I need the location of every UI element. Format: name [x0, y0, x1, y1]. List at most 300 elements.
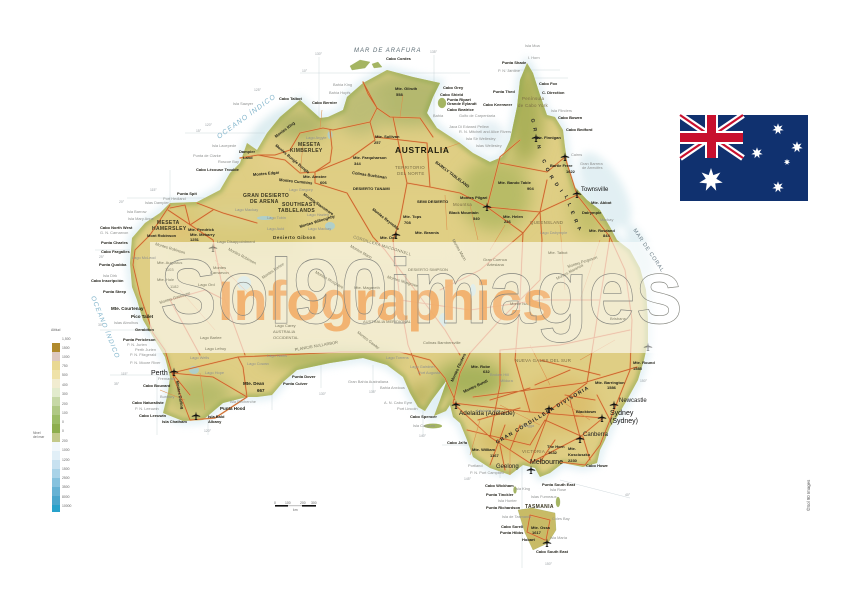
- south east and Tasmania labels: P. N. Port Campbell: [470, 470, 504, 475]
- scale bar: 100: [285, 501, 291, 505]
- south east and Tasmania labels: Mte. Round: [633, 360, 655, 365]
- north and Kimberley labels: 344: [354, 161, 361, 166]
- interior labels under the banner: Lago Carey: [275, 323, 296, 328]
- south east and Tasmania labels: 1617: [532, 530, 542, 535]
- south and west coast labels: Cabo Inscripción: [91, 278, 124, 283]
- interior labels under the banner: Montes Gascoyne: [159, 290, 192, 305]
- interior labels under the banner: Lago Ord: [198, 282, 215, 287]
- graticule degree labels: 130°: [319, 392, 327, 396]
- south east and Tasmania labels: 1586: [607, 385, 617, 390]
- south east and Tasmania labels: Isla Rose: [550, 487, 566, 492]
- south and west coast labels: Bahía Anxious: [380, 385, 405, 390]
- graticule degree labels: 40°: [625, 493, 631, 497]
- south and west coast labels: 1251: [190, 237, 200, 242]
- north and Kimberley labels: Cabo Lécouse Trouble: [196, 167, 240, 172]
- elevation legend: 500: [62, 373, 68, 377]
- south east and Tasmania labels: The Horn: [547, 444, 565, 449]
- south and west coast labels: Islas Dampier: [145, 200, 169, 205]
- ocean labels: MAR DE ARAFURA: [354, 48, 421, 54]
- interior labels under the banner: Gran Cuenca: [483, 257, 508, 262]
- Cape York and Queensland labels: Black Mountain: [449, 210, 479, 215]
- north and Kimberley labels: Mte. Gilruth: [395, 86, 418, 91]
- elevation legend: [33, 328, 72, 512]
- lakes: [189, 131, 476, 374]
- north and Kimberley labels: Cabo Talbot: [279, 96, 302, 101]
- south and west coast labels: Cabo North West: [100, 225, 133, 230]
- Cape York and Queensland labels: [449, 43, 615, 238]
- north and Kimberley labels: 708: [404, 220, 411, 225]
- north and Kimberley labels: Mte. Farquharson: [353, 155, 387, 160]
- interior labels under the banner: Carnarvon: [210, 270, 229, 275]
- south and west coast labels: Mte. Dean: [243, 381, 265, 386]
- south and west coast labels: Isla Mary Anne: [128, 216, 154, 221]
- south and west coast labels: Port Hedland: [163, 196, 186, 201]
- elevation legend: 300: [62, 392, 68, 396]
- graticule degree labels: 145°: [464, 477, 472, 481]
- graticule degree labels: 20°: [119, 200, 125, 204]
- Cape York and Queensland labels: Mte. Finnigan: [535, 135, 561, 140]
- Cape York and Queensland labels: I. Horn: [528, 55, 540, 60]
- interior labels under the banner: Montes: [213, 265, 226, 270]
- south and west coast labels: Montes Darling: [175, 380, 185, 410]
- elevation legend: 10000: [62, 504, 72, 508]
- elevation legend: 8000: [62, 495, 70, 499]
- shallow sea tint around the coast: [130, 63, 660, 477]
- interior labels under the banner: Monte Isa: [510, 301, 528, 306]
- graticule degree labels: 120°: [205, 123, 213, 127]
- ocean labels: MAR DE CORAL: [631, 228, 665, 274]
- elevation legend: 1000: [62, 355, 70, 359]
- north and Kimberley labels: Cabo Cordes: [386, 56, 412, 61]
- south and west coast labels: Port Augusta: [418, 370, 441, 375]
- elevation legend: 100: [62, 411, 68, 415]
- north and Kimberley labels: Golfo de Carpentaria: [459, 113, 496, 118]
- interior labels under the banner: AUSTRALIA MERIDIONAL: [363, 319, 412, 324]
- south and west coast labels: Punta Steep: [103, 289, 127, 294]
- north and Kimberley labels: Mte. Sullivan: [375, 134, 400, 139]
- south east and Tasmania labels: NUEVA GALES DEL SUR: [515, 358, 571, 363]
- north and Kimberley labels: Lago Auld: [267, 226, 284, 231]
- south and west coast labels: 667: [257, 388, 265, 393]
- north and Kimberley labels: Lago Mackay: [235, 207, 258, 212]
- south east and Tasmania labels: Mte. Ossa: [531, 525, 551, 530]
- interior labels under the banner: OCCIDENTAL: [273, 335, 299, 340]
- north and Kimberley labels: Bahía Hopfs: [329, 90, 350, 95]
- scale bar: [274, 501, 317, 512]
- road network: [133, 82, 637, 540]
- pale banner strip across the map: [150, 242, 680, 353]
- Cape York and Queensland labels: Gran Barrera: [580, 161, 604, 166]
- Cape York and Queensland labels: Mte. Abbot: [591, 200, 612, 205]
- interior labels under the banner: Artesiana: [487, 262, 505, 267]
- south and west coast labels: Port Lincoln: [397, 406, 418, 411]
- graticule degree labels: 135°: [369, 390, 377, 394]
- north and Kimberley labels: Isla Lacepede: [212, 143, 236, 148]
- south east and Tasmania labels: 2230: [568, 458, 578, 463]
- south and west coast labels: Cabo Fargalles: [101, 249, 130, 254]
- Cape York and Queensland labels: Bartle Frere: [550, 163, 573, 168]
- interior labels under the banner: Montes Barlee: [261, 261, 286, 280]
- north and Kimberley labels: Grande Eylandt: [447, 101, 477, 106]
- north and Kimberley labels: Cabo Shield: [440, 92, 464, 97]
- north and Kimberley labels: Montes Edgar: [253, 170, 280, 177]
- south east and Tasmania labels: Adelaida (Adelaide): [459, 410, 515, 417]
- north and Kimberley labels: 257: [374, 140, 381, 145]
- interior labels under the banner: Montes Gawler: [356, 330, 381, 351]
- interior labels under the banner: Colinas Barnbersville: [423, 340, 461, 345]
- elevation legend: 3500: [62, 485, 70, 489]
- north and Kimberley labels: Lago Mackay: [308, 226, 331, 231]
- south and west coast labels: Mte. Pendrick: [188, 227, 215, 232]
- interior labels under the banner: 1103: [165, 267, 174, 272]
- interior labels under the banner: Mte. Hale: [157, 277, 175, 282]
- south and west coast labels: Isla Recherche: [230, 399, 256, 404]
- Cape York and Queensland labels: 226: [504, 219, 511, 224]
- interior labels under the banner: Brisbane: [610, 316, 627, 321]
- Cape York and Queensland labels: Isla Moa: [525, 43, 541, 48]
- north and Kimberley labels: BARKLY TABLELAND: [434, 160, 471, 189]
- interior labels under the banner: Mte. Magareth: [354, 285, 380, 290]
- north and Kimberley labels: Cabo Beatrice: [447, 107, 475, 112]
- Cape York and Queensland labels: Mountsa: [453, 202, 472, 207]
- north and Kimberley labels: Lago Argyle: [306, 135, 327, 140]
- south east and Tasmania labels: Mte. William: [472, 447, 496, 452]
- south and west coast labels: A. N. Cabo Eyre: [384, 400, 412, 405]
- south and west coast labels: Lago Hope: [205, 370, 224, 375]
- north and Kimberley labels: Montes Bungle Bungle: [274, 143, 311, 175]
- north and Kimberley labels: Bahía King: [333, 82, 352, 87]
- north and Kimberley labels: Cabo Bernier: [312, 100, 338, 105]
- south east and Tasmania labels: Adelaide Hills: [476, 408, 500, 413]
- south east and Tasmania labels: Broken Hill: [490, 372, 509, 377]
- south east and Tasmania labels: Cabo South East: [536, 549, 569, 554]
- south east and Tasmania labels: 632: [483, 369, 490, 374]
- Cape York and Queensland labels: P. N. Jardine: [498, 68, 520, 73]
- scale bar: 300: [311, 501, 317, 505]
- interior labels under the banner: Montes Robinson: [155, 241, 186, 255]
- north and Kimberley labels: Dampier: [239, 149, 255, 154]
- stars: [699, 123, 803, 192]
- elevation legend: 750: [62, 364, 68, 368]
- south east and Tasmania labels: Isla King: [515, 486, 530, 491]
- graticule degree labels: 135°: [430, 50, 438, 54]
- north and Kimberley labels: Mte. Dol: [380, 235, 396, 240]
- north and Kimberley labels: TABLELANDS: [278, 208, 315, 214]
- south and west coast labels: MESETA: [157, 220, 180, 226]
- interior labels under the banner: [155, 234, 627, 352]
- south east and Tasmania labels: Cabo Wickham: [485, 483, 514, 488]
- north and Kimberley labels: Mte. Tops: [403, 214, 422, 219]
- elevation legend: Altitud: [51, 328, 61, 332]
- graticule: [95, 55, 630, 568]
- south and west coast labels: Cabo Naturaliste: [132, 400, 165, 405]
- graticule degree labels: 115°: [150, 188, 157, 192]
- interior labels under the banner: PLANICIE NULLARBOR: [294, 339, 338, 352]
- south and west coast labels: Punta Quobba: [99, 262, 127, 267]
- graticule degree labels: [98, 50, 648, 566]
- south and west coast labels: Pico Tallet: [131, 314, 154, 319]
- south east and Tasmania labels: VICTORIA: [522, 449, 545, 454]
- elevation legend: 2500: [62, 476, 70, 480]
- interior labels under the banner: 1182: [170, 284, 179, 289]
- graticule degree labels: 15°: [196, 129, 202, 133]
- islands: [350, 60, 560, 550]
- south east and Tasmania labels: Geelong: [496, 464, 519, 470]
- Cape York and Queensland labels: Cabo Bowen: [558, 115, 583, 120]
- south and west coast labels: Punta Charles: [101, 240, 129, 245]
- watermark: orange wordmark: Infographics: [218, 269, 553, 332]
- south and west coast labels: G. N. Carnarvon: [100, 230, 128, 235]
- Cape York and Queensland labels: Cabo Bedford: [566, 127, 593, 132]
- graticule degree labels: 35°: [114, 382, 120, 386]
- relief colour masses: [158, 65, 610, 454]
- Cape York and Queensland labels: Cabo Fox: [539, 81, 558, 86]
- north and Kimberley labels: Isla Sir Wellesley: [466, 136, 496, 141]
- ocean labels: OCEANO ÍNDICO: [215, 92, 278, 141]
- interior labels under the banner: Mte. Talbot: [548, 250, 568, 255]
- Cape York and Queensland labels: Cabo Keerweer: [483, 102, 513, 107]
- coastal green rim: [130, 63, 648, 477]
- south and west coast labels: Mte. Courtenay: [111, 306, 144, 311]
- north and Kimberley labels: Colinas Buchanan: [352, 170, 388, 180]
- Cape York and Queensland labels: de Cabo York: [518, 103, 548, 108]
- north and Kimberley labels: Montes Willoughby: [299, 213, 336, 229]
- elevation legend: 200: [62, 402, 68, 406]
- elevation legend: 1200: [62, 458, 70, 462]
- south east and Tasmania labels: 1632: [548, 450, 558, 455]
- interior labels under the banner: CORDILLERA MACDONNELL: [353, 234, 413, 257]
- north and Kimberley labels: KIMBERLEY: [290, 148, 323, 154]
- north and Kimberley labels: Islas Wellesley: [476, 143, 502, 148]
- interior labels under the banner: Montes Musgrave: [387, 274, 419, 288]
- north and Kimberley labels: DE ARENA: [250, 199, 279, 205]
- interior labels under the banner: Lago Lefroy: [205, 346, 226, 351]
- south east and Tasmania labels: Mildura: [500, 378, 514, 383]
- ocean labels: OCEANO ÍNDICO: [89, 294, 123, 360]
- south and west coast labels: Isla Chatham: [162, 419, 187, 424]
- north and Kimberley labels: TERRITORIO: [395, 165, 425, 170]
- south and west coast labels: Mont Robinson: [147, 233, 177, 238]
- graticule degree labels: 30°: [98, 323, 104, 327]
- south east and Tasmania labels: Blacktown: [576, 409, 597, 414]
- south and west coast labels: Albany: [208, 419, 222, 424]
- south and west coast labels: Mte. Meharry: [190, 232, 215, 237]
- graticule degree labels: 120°: [204, 429, 212, 433]
- flag of Australia: [680, 115, 808, 201]
- north and Kimberley labels: Mte. Brannis: [415, 230, 440, 235]
- north and Kimberley labels: Jaca Di Edward Pellew: [449, 124, 489, 129]
- Cape York and Queensland labels: 844: [603, 233, 610, 238]
- south east and Tasmania labels: Wagga: [522, 423, 535, 428]
- south and west coast labels: Cabo Leeuwin: [139, 413, 167, 418]
- graticule degree labels: 150°: [545, 562, 553, 566]
- Cape York and Queensland labels: Montes Pilgari: [460, 195, 487, 200]
- south east and Tasmania labels: Canberra: [583, 432, 609, 438]
- north and Kimberley labels: Montes Cummins: [279, 177, 313, 186]
- south and west coast labels: Isla Dirk: [103, 273, 117, 278]
- north and Kimberley labels: Montes Stansmore: [302, 192, 335, 217]
- scale bar: km: [293, 508, 298, 512]
- north and Kimberley labels: Punta Ripart: [447, 97, 471, 102]
- south and west coast labels: Bunbury: [160, 394, 175, 399]
- Cape York and Queensland labels: Lago Dalrymple: [540, 230, 567, 235]
- north and Kimberley labels: Isla Sawyer: [233, 101, 254, 106]
- south east and Tasmania labels: Portland: [468, 463, 482, 468]
- south and west coast labels: Lago Torrens: [386, 355, 409, 360]
- south and west coast labels: HAMERSLEY: [152, 226, 187, 232]
- south east and Tasmania labels: Punta South East: [542, 482, 576, 487]
- north and Kimberley labels: Punta de Clarke: [193, 153, 221, 158]
- north and Kimberley labels: SOUTHEAST: [282, 202, 316, 208]
- south east and Tasmania labels: Isla Hunter: [498, 498, 518, 503]
- elevation legend: 0: [62, 420, 64, 424]
- south east and Tasmania labels: Melbourne: [530, 459, 563, 466]
- south east and Tasmania labels: Montes Flinders: [449, 352, 467, 382]
- south and west coast labels: Lago Wells: [190, 355, 209, 360]
- interior labels under the banner: Montes Mann: [350, 244, 373, 260]
- south east and Tasmania labels: (Sydney): [610, 418, 638, 425]
- south and west coast labels: Isla Bald: [208, 414, 225, 419]
- Cape York and Queensland labels: GRAN CORDILLERA: [531, 118, 581, 230]
- Cape York and Queensland labels: Cairns: [571, 152, 582, 157]
- north and Kimberley labels: [193, 56, 511, 240]
- north and Kimberley labels: Montes Reynolds: [371, 207, 401, 232]
- elevation legend: 1500: [62, 346, 70, 350]
- south and west coast labels: Lago Cowan: [247, 361, 269, 366]
- interior labels under the banner: AUSTRALIA: [273, 329, 296, 334]
- north and Kimberley labels: Land: [243, 155, 253, 160]
- interior labels under the banner: Lago Disappointment: [217, 239, 256, 244]
- Cape York and Queensland labels: 1622: [566, 169, 576, 174]
- south and west coast labels: Lago McLeod: [132, 255, 156, 260]
- north and Kimberley labels: R. N. Mitchell and Alice Rivers: [459, 129, 511, 134]
- south and west coast labels: Isla Canguro: [413, 423, 435, 428]
- north and Kimberley labels: 606: [320, 180, 327, 185]
- Cape York and Queensland labels: 904: [527, 186, 534, 191]
- north and Kimberley labels: Desierto Gibson: [273, 235, 316, 240]
- image credit: ©Sol 90 Images: [806, 479, 811, 511]
- Cape York and Queensland labels: Mte. Helen: [503, 214, 524, 219]
- scale bar: 200: [300, 501, 306, 505]
- watermark: outlined wordmark: Sol90images: [160, 241, 683, 343]
- north and Kimberley labels: Mte. Amstee: [303, 174, 327, 179]
- interior labels under the banner: Montes Ferguson: [567, 255, 598, 269]
- south east and Tasmania labels: 1585: [633, 366, 643, 371]
- north and Kimberley labels: Lago Tobin: [267, 215, 286, 220]
- south east and Tasmania labels: Mte. Robe: [471, 364, 491, 369]
- north and Kimberley labels: GRAN DESIERTO: [243, 193, 289, 199]
- elevation legend: 400: [62, 383, 68, 387]
- south and west coast labels: Fremantle: [158, 376, 176, 381]
- elevation legend: 1,500: [62, 337, 71, 341]
- interior labels under the banner: Montes Musgrave: [314, 270, 345, 290]
- interior labels under the banner: Montes Maranoa: [555, 262, 585, 281]
- south and west coast labels: Gran Bahía Australiana: [348, 379, 389, 384]
- south and west coast labels: P. N. Fitzgerald: [130, 352, 156, 357]
- south and west coast labels: Punta Spit: [177, 191, 197, 196]
- south east and Tasmania labels: Cabo Sorell: [501, 524, 523, 529]
- Cape York and Queensland labels: Dalrymple: [582, 210, 602, 215]
- graticule degree labels: 140°: [419, 434, 427, 438]
- north and Kimberley labels: Roscoe Bay: [218, 159, 239, 164]
- graticule degree labels: 115°: [121, 372, 128, 376]
- Cape York and Queensland labels: de Arrecifes: [582, 165, 603, 170]
- north and Kimberley labels: SEMI DESIERTO: [417, 199, 448, 204]
- north and Kimberley labels: DESIERTO TANAMI: [353, 186, 390, 191]
- north and Kimberley labels: Montes King: [274, 120, 296, 139]
- south east and Tasmania labels: Isla María: [550, 535, 568, 540]
- elevation legend: 1500: [62, 467, 70, 471]
- Cape York and Queensland labels: 540: [473, 216, 480, 221]
- south and west coast labels: Islas Abrolhos: [114, 320, 138, 325]
- south east and Tasmania labels: Mte.: [568, 446, 576, 451]
- Cape York and Queensland labels: Mte. Bando Table: [498, 180, 532, 185]
- continent relief: Australia: [130, 63, 648, 477]
- elevation legend: 0: [62, 429, 64, 433]
- south east and Tasmania labels: [447, 352, 655, 554]
- south east and Tasmania labels: 1167: [490, 453, 499, 458]
- south east and Tasmania labels: Punta Richardson: [486, 505, 521, 510]
- interior labels under the banner: DESIERTO SIMPSON: [408, 267, 448, 272]
- south east and Tasmania labels: Mte. Barrington: [595, 380, 625, 385]
- Cape York and Queensland labels: Punta Thed: [493, 89, 515, 94]
- south east and Tasmania labels: Coles Bay: [552, 516, 570, 521]
- south and west coast labels: Geraldton: [135, 327, 154, 332]
- interior labels under the banner: Mte. Augustus: [157, 260, 182, 265]
- south and west coast labels: Punta Pericleson: [123, 337, 156, 342]
- graticule degree labels: 125°: [268, 383, 276, 387]
- scale bar: 0: [274, 501, 276, 505]
- south east and Tasmania labels: Montes Bundi: [462, 378, 488, 394]
- Cape York and Queensland labels: Isla Flinders: [551, 108, 572, 113]
- graticule degree labels: 125°: [254, 88, 262, 92]
- Cape York and Queensland labels: Townsville: [581, 187, 609, 193]
- ocean labels: [89, 48, 665, 360]
- south and west coast labels: P. N. Moore River: [130, 360, 161, 365]
- south east and Tasmania labels: TASMANIA: [525, 504, 554, 510]
- south and west coast labels: P. N. Leeuwin: [135, 406, 159, 411]
- north and Kimberley labels: DEL NORTE: [397, 171, 425, 176]
- north and Kimberley labels: Cabo Grey: [443, 85, 464, 90]
- south and west coast labels: Punta Dover: [292, 374, 316, 379]
- graticule degree labels: 150°: [640, 379, 648, 383]
- Cape York and Queensland labels: Mackay: [600, 217, 613, 222]
- north and Kimberley labels: Bahía: [433, 113, 444, 118]
- Cape York and Queensland labels: C. Direction: [542, 90, 565, 95]
- south and west coast labels: Cabo Spencer: [410, 414, 437, 419]
- south east and Tasmania labels: Cabo Howe: [586, 463, 609, 468]
- Cape York and Queensland labels: Península: [522, 96, 544, 101]
- Cape York and Queensland labels: QUEENSLAND: [530, 220, 563, 225]
- interior labels under the banner: Montes Mann: [451, 238, 468, 261]
- interior labels under the banner: Lago Barlee: [200, 335, 222, 340]
- Cape York and Queensland labels: Punta Shade: [502, 60, 527, 65]
- south east and Tasmania labels: Sydney: [610, 410, 634, 417]
- south and west coast labels: P. N. Jurien: [127, 342, 147, 347]
- elevation legend: Nivel: [33, 431, 41, 435]
- south east and Tasmania labels: Punta Tinckler: [486, 492, 514, 497]
- north and Kimberley labels: Lago Gregory: [289, 187, 313, 192]
- elevation legend: 200: [62, 439, 68, 443]
- Cape York and Queensland labels: Mte. Rowland: [589, 228, 615, 233]
- union jack canton: [680, 115, 743, 158]
- south east and Tasmania labels: Punta Hibbs: [500, 530, 524, 535]
- south and west coast labels: Lago Harris: [267, 353, 287, 358]
- south east and Tasmania labels: Hobart: [522, 537, 536, 542]
- graticule degree labels: 25°: [99, 255, 105, 259]
- south and west coast labels: Punta Culver: [283, 381, 308, 386]
- south and west coast labels: [91, 191, 441, 428]
